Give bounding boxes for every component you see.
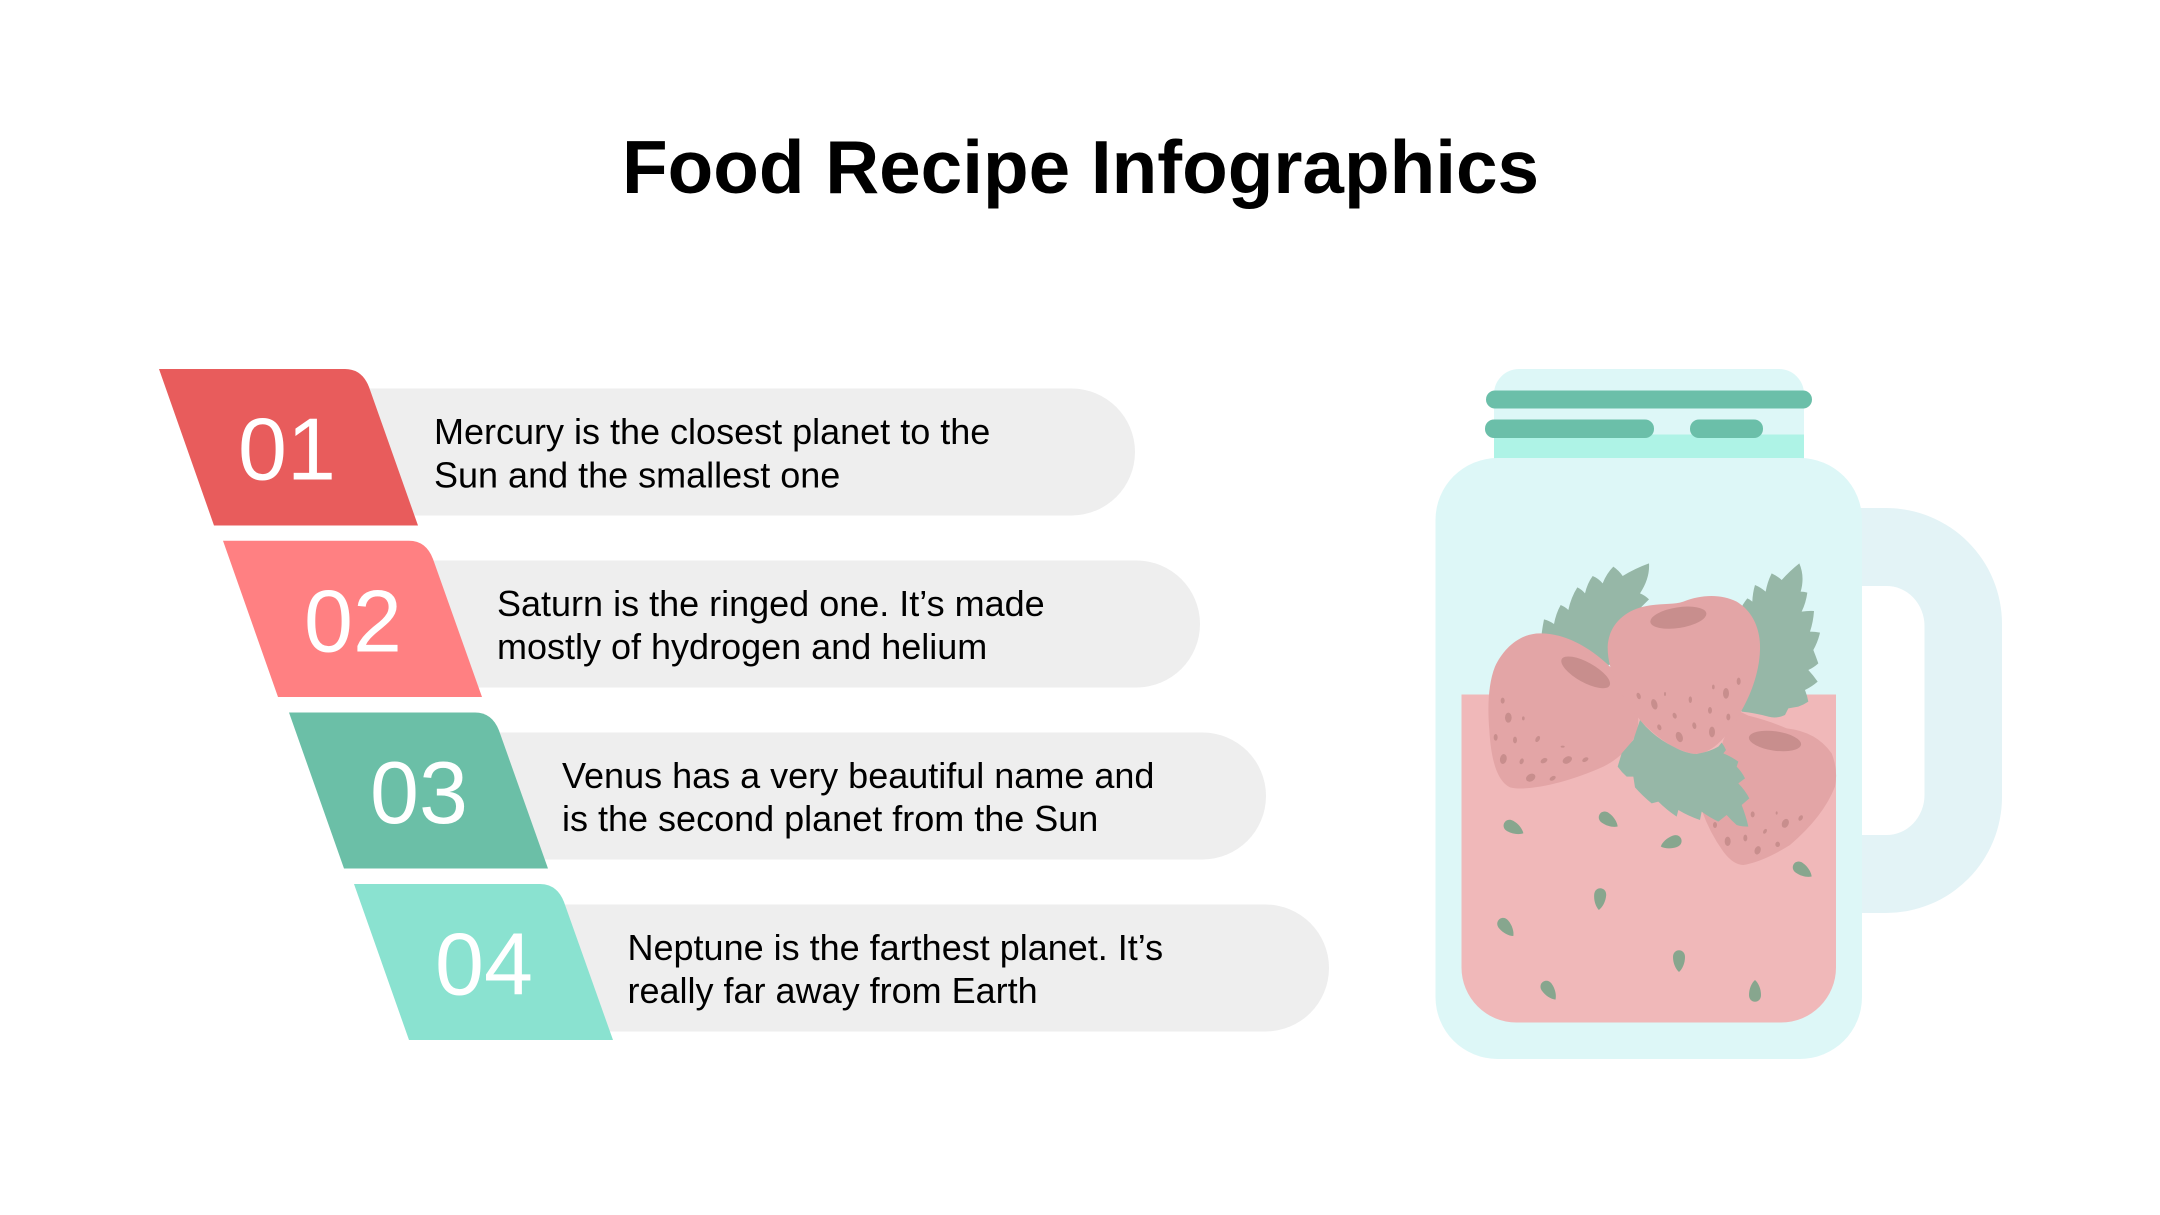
strawberry right: [1702, 710, 1836, 865]
number badge 02: [223, 541, 482, 697]
description 02: mostly of hydrogen and helium: [497, 626, 987, 667]
leaf bottom: [1618, 720, 1749, 827]
description 04: Neptune is the farthest planet. It’s: [628, 927, 1163, 968]
step 01: [159, 369, 1135, 526]
text pill 04: [535, 904, 1329, 1032]
text pill 03: [470, 732, 1266, 860]
description 03: is the second planet from the Sun: [562, 798, 1098, 839]
leaf top right: [1730, 563, 1820, 718]
number 02: 02: [304, 572, 402, 670]
number 01: 01: [238, 400, 336, 498]
floating seeds: [1495, 809, 1815, 1003]
text pill 01: [340, 388, 1135, 516]
description 03: Venus has a very beautiful name and: [562, 755, 1154, 796]
leaf top left: [1542, 563, 1649, 665]
jar lid: [1494, 369, 1804, 458]
lid bar left: [1485, 420, 1654, 438]
illustration: strawberry smoothie jar: [1436, 369, 2002, 1059]
jar body: [1436, 458, 1862, 1059]
description 01: Sun and the smallest one: [434, 454, 840, 496]
description 01: Mercury is the closest planet to the: [434, 411, 990, 452]
number badge 01: [159, 369, 418, 526]
number badge 03: [289, 712, 548, 868]
smoothie liquid: [1462, 694, 1836, 1022]
number 03: 03: [370, 743, 468, 842]
step 04: [354, 884, 1329, 1040]
lid bar top: [1486, 390, 1812, 408]
lid band: [1494, 434, 1804, 460]
jar handle: [1850, 508, 2002, 913]
strawberry centre: [1608, 596, 1760, 754]
number 04: 04: [435, 914, 533, 1014]
strawberry left: [1488, 633, 1638, 788]
step 02: [223, 541, 1200, 697]
step 03: [289, 712, 1266, 868]
number badge 04: [354, 884, 613, 1040]
strawberries and leaves: [1488, 563, 1836, 865]
text pill 02: [404, 560, 1200, 688]
title: Food Recipe Infographics: [622, 125, 1539, 209]
description 04: really far away from Earth: [628, 970, 1038, 1011]
description 02: Saturn is the ringed one. It’s made: [497, 583, 1045, 624]
lid bar right: [1690, 420, 1763, 438]
